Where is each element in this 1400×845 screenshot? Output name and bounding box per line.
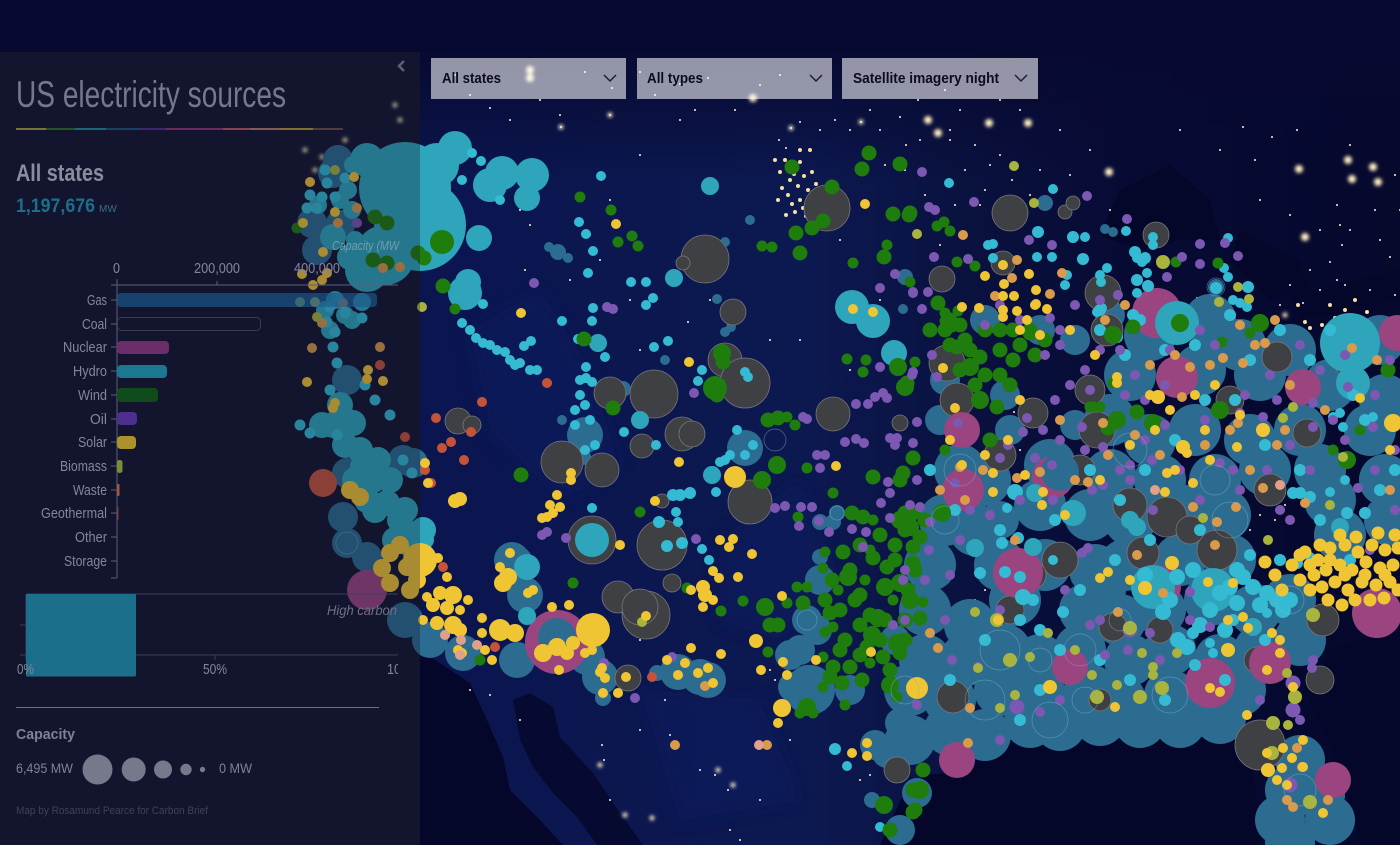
legend circles (82, 754, 205, 784)
map bubbles: brighter hydro scatter (300, 153, 1395, 827)
dropdown: base map (842, 58, 1038, 99)
axis labels: 400,000 (294, 261, 340, 277)
map bubbles: pink plants (445, 485, 1280, 745)
title: US electricity sources (16, 74, 286, 115)
map bubbles: wind farms (297, 153, 1388, 830)
map bubbles: nuclear plants (367, 313, 1397, 780)
low carbon segment (26, 594, 136, 676)
chart frame (20, 594, 398, 660)
dropdown: base map: Satellite imagery night (853, 70, 999, 87)
row labels: Storage (64, 554, 107, 570)
map bubbles: oil plants (357, 172, 1395, 785)
capacity legend: Capacity (16, 726, 76, 743)
credit: Map by Rosamund Pearce for Carbon Brief (16, 805, 209, 817)
row labels: Nuclear (63, 340, 107, 356)
dropdown: types (637, 58, 832, 99)
map bubbles: gas rings over nuclear (557, 472, 1060, 637)
high carbon label: High carbon (327, 603, 397, 618)
dropdown: states: All states (442, 70, 501, 87)
percent axis labels: 10 (387, 662, 401, 678)
percent axis labels: 0% (17, 662, 34, 678)
capacity legend: 6,495 MW (16, 760, 74, 776)
total capacity: 1,197,676 (16, 195, 95, 217)
divider (16, 706, 379, 708)
bars (117, 293, 377, 520)
map bubbles: hydro plants (318, 148, 1353, 627)
carbon stacked bar chart (17, 594, 401, 678)
axis labels (113, 261, 340, 277)
map bubbles: solar plants (302, 177, 1398, 813)
row labels (41, 293, 107, 570)
axis labels: 200,000 (194, 261, 240, 277)
row labels: Wind (78, 388, 107, 404)
collapse chevron (399, 61, 404, 71)
row labels: Oil (90, 412, 107, 428)
capacity legend (16, 726, 253, 784)
sidebar translucent overlay (0, 52, 420, 845)
map bubbles: geothermal plants (323, 365, 652, 677)
axis labels: 0 (113, 261, 120, 277)
capacity bar chart (41, 261, 398, 578)
capacity axis title: Capacity (MW (332, 238, 400, 253)
total capacity: MW (99, 204, 117, 215)
map bubbles: large gas plants (312, 160, 1390, 843)
capacity legend: 0 MW (219, 760, 253, 776)
row labels: Other (75, 530, 107, 546)
capacity rings on gas plants (336, 278, 1316, 806)
row labels: Biomass (60, 459, 107, 475)
row labels: Gas (87, 293, 107, 309)
map bubbles: waste plants (312, 208, 1390, 807)
percent axis labels (18, 664, 398, 674)
top band (0, 0, 1400, 52)
dropdown: states (431, 58, 626, 99)
axis lines (111, 279, 398, 578)
row labels: Solar (78, 435, 107, 451)
row ticks (111, 300, 117, 561)
row labels: Waste (73, 483, 107, 499)
dropdown: types: All types (647, 70, 703, 87)
row labels: Coal (82, 317, 107, 333)
map bubbles: coal plants (445, 185, 1364, 783)
row labels: Geothermal (41, 506, 107, 522)
row labels: Hydro (73, 364, 107, 380)
percent axis labels: 50% (203, 662, 227, 678)
map bubbles: biomass plants (300, 166, 1343, 802)
city lights at night (305, 70, 1400, 840)
selected state heading: All states (16, 160, 104, 187)
sidebar panel (0, 52, 420, 845)
rainbow title rule (16, 128, 343, 130)
